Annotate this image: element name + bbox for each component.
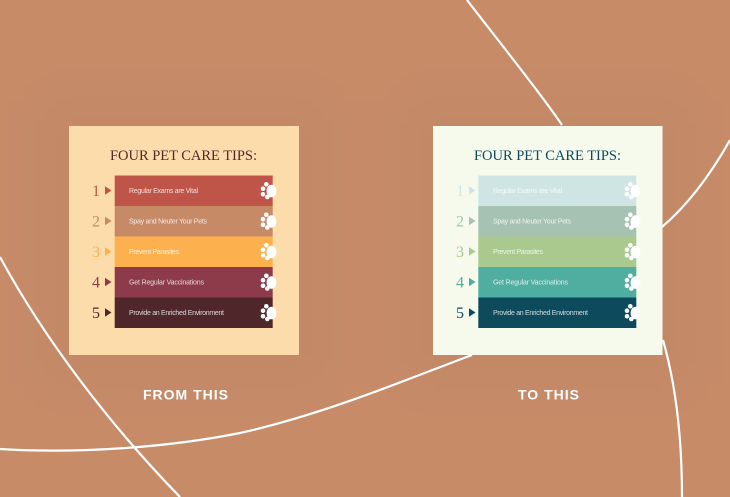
row 2 [92,206,276,236]
row 4 [456,267,640,298]
row 1: 1 [456,183,464,200]
row 4 [92,267,276,298]
row 4: 4 [92,274,100,292]
row 5 [92,298,276,328]
row 1: 1 [92,183,100,200]
row 3: 3 [456,244,464,261]
row 2: 2 [92,214,100,230]
row 2: Spay and Neuter Your Pets [493,218,572,226]
caption: from this: FROM THIS [143,386,228,402]
row 3 [456,236,640,267]
row 3: Prevent Parasites [129,249,180,256]
row 5: Provide an Enriched Environment [493,310,588,317]
row 3: 3 [92,244,100,261]
row 3: Prevent Parasites [493,249,544,256]
panel: to this [433,126,662,355]
row 1: Regular Exams are Vital [493,188,562,195]
row 1 [456,176,640,206]
soft panel shadows [40,100,692,385]
row 2 [456,206,640,236]
row 4: Get Regular Vaccinations [493,280,568,286]
row 5 [456,298,640,328]
row 2: Spay and Neuter Your Pets [129,218,208,226]
row 3 [92,236,276,267]
panel: from this [69,126,299,355]
title: FOUR PET CARE TIPS: [474,148,621,164]
caption: to this: TO THIS [518,386,579,402]
row 4: Get Regular Vaccinations [129,280,204,286]
row 4: 4 [456,274,464,292]
title: FOUR PET CARE TIPS: [110,148,257,164]
row 5: Provide an Enriched Environment [129,310,224,317]
row 5: 5 [92,305,100,322]
row 2: 2 [456,214,464,230]
row 1 [92,176,276,206]
row 1: Regular Exams are Vital [129,188,198,195]
row 5: 5 [456,305,464,322]
